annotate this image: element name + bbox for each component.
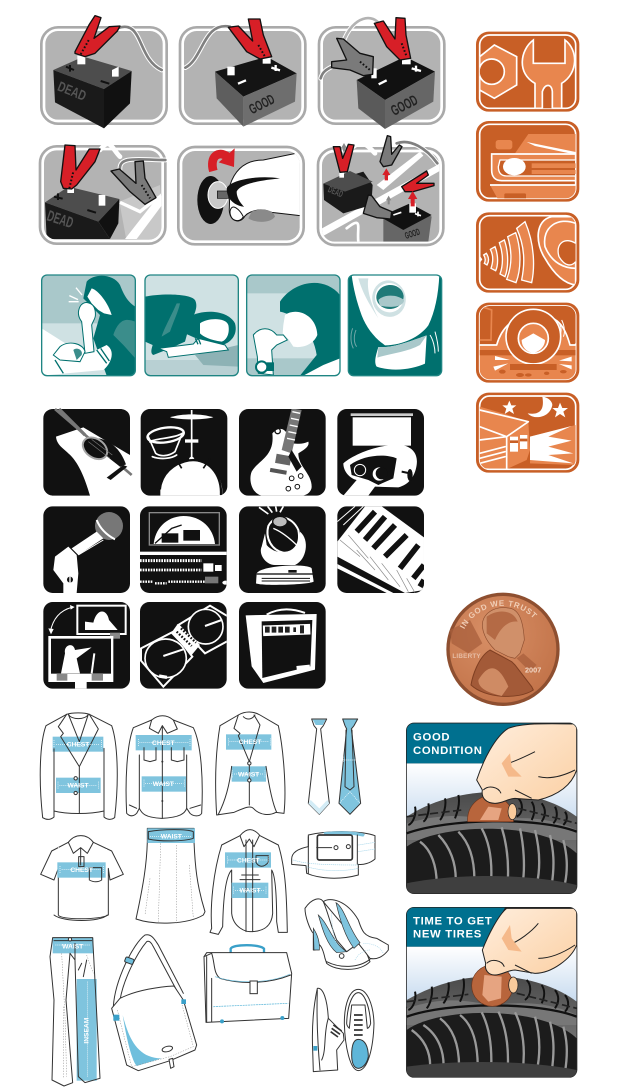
hand bbox=[482, 908, 577, 975]
penny in tread bbox=[472, 965, 513, 1006]
panel: good battery with red clamp: GOOD bbox=[246, 91, 277, 117]
panel: removing clamps in order: GOOD bbox=[404, 227, 421, 241]
messenger bag bbox=[112, 935, 197, 1071]
panel: good battery with red and black clamps bbox=[319, 18, 444, 129]
clothing sizing icons bbox=[40, 712, 375, 934]
panel: mixing desk bbox=[140, 506, 229, 593]
panel: tire on ground bbox=[476, 303, 579, 383]
hand bbox=[477, 724, 577, 803]
blouse bbox=[210, 830, 287, 934]
belt bbox=[292, 831, 375, 878]
icon: lift arrows bbox=[382, 168, 417, 206]
blouse: WAIST bbox=[239, 888, 261, 895]
teal health icons bbox=[42, 275, 442, 376]
panel: woman lying down bbox=[145, 275, 238, 376]
panel: projector and screen bbox=[337, 409, 424, 496]
women's blazer bbox=[216, 712, 285, 815]
panel: acoustic guitar bbox=[43, 409, 132, 496]
shoe side view bbox=[312, 988, 344, 1072]
tie outline bbox=[308, 719, 329, 814]
icon: moon bbox=[528, 397, 552, 417]
trousers bbox=[50, 938, 100, 1086]
guitar neck and strings bbox=[55, 409, 132, 475]
text: liberty: LIBERTY bbox=[452, 653, 481, 660]
panel: tire good condition bbox=[406, 723, 577, 894]
header band bbox=[407, 723, 577, 763]
panel: open mouth closeup bbox=[348, 275, 442, 376]
panel: sound waves and ear bbox=[476, 212, 579, 293]
text: year: 2007 bbox=[525, 666, 541, 675]
panel: video screens with performers bbox=[43, 602, 130, 689]
panel: dead battery with red clamp bbox=[41, 16, 167, 128]
polo shirt: CHEST bbox=[70, 867, 93, 874]
shoe top view bbox=[344, 989, 374, 1071]
portrait of Lincoln bbox=[471, 608, 533, 696]
panel: DJ turntables bbox=[140, 602, 228, 689]
panel: tire time to replace bbox=[406, 907, 577, 1078]
jacket: WAIST bbox=[67, 783, 89, 790]
panel: woman with hand to mouth bbox=[247, 275, 340, 376]
lower clothing icons bbox=[50, 899, 388, 1086]
tire bbox=[407, 976, 577, 1077]
jacket: CHEST bbox=[67, 742, 89, 749]
tie blue bbox=[339, 719, 361, 814]
panel: electric guitar bbox=[239, 408, 326, 496]
battery jump-start icons bbox=[40, 16, 444, 245]
panel: moving stage light bbox=[239, 506, 326, 593]
panel: headlights at night bbox=[476, 393, 579, 473]
penny bbox=[446, 592, 560, 706]
button-up shirt: CHEST bbox=[152, 740, 175, 747]
panel: drum kit bbox=[140, 409, 228, 496]
black music and AV icons bbox=[43, 408, 424, 689]
panel: dead battery, grey clamp on car frame bbox=[40, 144, 165, 244]
orange car symptom icons bbox=[476, 32, 579, 473]
panel: dead battery with red clamp: DEAD bbox=[56, 78, 89, 104]
text: motto: IN GOD WE TRUST bbox=[460, 600, 538, 629]
text: good condition: CONDITION bbox=[413, 745, 483, 757]
icon: hand bbox=[229, 152, 301, 221]
panel: microphone bbox=[43, 506, 130, 593]
polo shirt bbox=[41, 836, 123, 920]
panel: dead battery, grey clamp on car frame: DEAD bbox=[45, 208, 75, 232]
panel: removing clamps in order bbox=[318, 136, 443, 245]
trousers: WAIST bbox=[62, 943, 83, 950]
guitar bridge bbox=[107, 465, 127, 480]
text: time to get new tires: TIME TO GET bbox=[413, 915, 493, 927]
penny in tread bbox=[468, 796, 514, 822]
jacket bbox=[40, 713, 117, 819]
text: good condition: GOOD bbox=[413, 732, 450, 744]
panel: car front bbox=[476, 121, 579, 202]
button-up shirt: WAIST bbox=[153, 781, 174, 788]
button-up shirt bbox=[126, 716, 202, 818]
icon: red turn arrow bbox=[212, 148, 235, 171]
trousers: INSEAM bbox=[84, 1017, 91, 1044]
panel: piano keys bbox=[337, 506, 424, 593]
icon: stars bbox=[502, 401, 568, 417]
skirt: WAIST bbox=[161, 833, 182, 840]
high heels bbox=[305, 899, 388, 969]
skirt bbox=[136, 828, 205, 923]
text: time to get new tires: NEW TIRES bbox=[413, 928, 482, 940]
tire bbox=[407, 792, 577, 893]
panel: guitar amplifier bbox=[239, 602, 326, 689]
women's blazer: WAIST bbox=[238, 771, 259, 778]
panel: woman coughing bbox=[42, 275, 135, 376]
panel: removing clamps in order: DEAD bbox=[327, 184, 345, 199]
panel: turning ignition key bbox=[178, 147, 304, 244]
header band bbox=[407, 908, 505, 947]
briefcase bbox=[204, 945, 292, 1023]
panel: good battery with red and black clamps: GOOD bbox=[389, 93, 421, 120]
panel: nut and wrench bbox=[476, 32, 579, 112]
panel: good battery with red clamp bbox=[180, 19, 305, 127]
women's blazer: CHEST bbox=[239, 739, 261, 746]
blouse: CHEST bbox=[237, 857, 260, 864]
